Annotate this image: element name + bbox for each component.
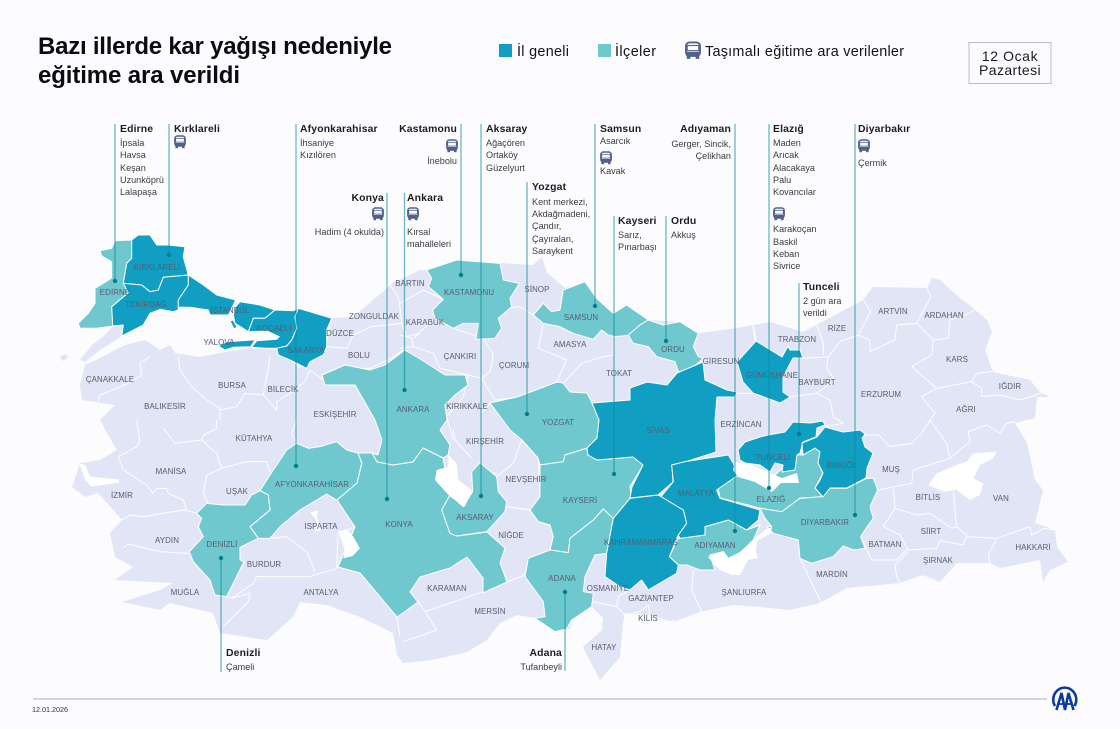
province labels: TUNCELİ [756,453,790,462]
callout: Ankara: mahalleleri [407,239,451,249]
provinces with partial closure (İlçeler) [78,240,878,632]
province labels: KASTAMONU [444,288,494,297]
callout: Yozgat: Kent merkezi, [532,197,588,207]
province labels: GAZİANTEP [628,594,674,603]
callout: Konya [315,193,389,501]
callout: Edirne: Keşan [120,163,146,173]
province labels: ANKARA [396,405,430,414]
callout: Elazığ: Elazığ [773,124,804,135]
province labels: ERZURUM [861,390,901,399]
province labels: BİLECİK [268,385,299,394]
callout: Adana [520,590,567,672]
province labels: KİLİS [638,614,658,623]
province labels: AYDIN [155,536,179,545]
base land [60,257,1068,680]
province labels: UŞAK [226,487,249,496]
province borders: northeast [753,288,1042,427]
callout: Yozgat: Akdağmadeni, [532,209,590,219]
lake: Keban [733,462,799,492]
callout: Adıyaman: Gerger, Sincik, [671,139,731,149]
province labels: İZMİR [111,491,133,500]
lakes [310,452,997,575]
province: Elazığ [718,448,823,512]
province labels: ADANA [548,574,576,583]
callout: Ordu: Ordu [671,216,696,227]
callout: Edirne: Havsa [120,150,147,160]
province: Denizli [189,491,270,597]
callout: Diyarbakır: Çermik [858,158,887,168]
province labels: DÜZCE [326,329,354,338]
province labels: NEVŞEHİR [505,475,547,484]
province: Adıyaman [669,520,760,570]
province labels: SAMSUN [564,313,598,322]
province labels: AKSARAY [456,513,494,522]
province labels: EDİRNE [100,288,130,297]
callout: Elazığ: Alacakaya [773,163,816,173]
date box [969,42,1051,84]
province labels: KARAMAN [427,584,467,593]
province: Edirne [78,240,132,328]
callout: Aksaray: Güzelyurt [486,163,525,173]
callout: Kayseri: Pınarbaşı [618,242,657,252]
province labels: ELAZIĞ [757,495,785,504]
callout: Samsun: Kavak [600,166,626,176]
province labels: ANTALYA [304,588,339,597]
province labels: ISPARTA [304,522,338,531]
callout: Elazığ: Palu [773,175,791,185]
province labels: SİVAS [646,426,670,435]
callout: Denizli: Çameli [226,662,254,672]
province labels: GİRESUN [703,357,740,366]
province labels: HAKKARİ [1015,543,1051,552]
province labels: ERZİNCAN [720,420,762,429]
province labels: KARS [946,355,968,364]
callout: Edirne [113,124,164,283]
callout: Ankara: Ankara [407,193,443,204]
province labels: BİNGÖL [827,461,858,470]
callout: Denizli: Denizli [226,648,261,659]
province: İstanbul [178,275,275,332]
province labels: ŞIRNAK [923,556,954,565]
province labels: ZONGULDAK [349,312,400,321]
callout: Aksaray: Aksaray [486,124,528,135]
province labels: SAKARYA [287,346,325,355]
province: Sivas [587,362,737,498]
province: Ordu [628,320,703,372]
province labels: DENİZLİ [207,540,237,549]
province labels: KAYSERİ [563,496,597,505]
title [38,33,392,89]
province labels: BAYBURT [798,378,836,387]
callout: Afyonkarahisar [294,124,378,468]
callout: Adıyaman: Çelikhan [696,151,731,161]
province: Tunceli [738,421,825,472]
province labels: GÜMÜŞHANE [746,371,798,380]
province labels: ARDAHAN [924,311,964,320]
provinces with full closure (İl geneli) [112,235,873,590]
legend: taşımalı eğitim: Taşımalı eğitime ara verilenler [705,44,904,60]
callout: Adana: Tufanbeyli [520,662,562,672]
province: Sakarya [277,308,332,368]
callout: Edirne: Uzunköprü [120,175,164,185]
province labels: ŞANLIURFA [722,588,767,597]
callout: Tunceli: 2 gün ara [803,296,842,306]
province: Adana [525,509,613,632]
callout: Yozgat: Çayıralan, [532,234,573,244]
province labels [86,263,1051,652]
province labels: VAN [993,494,1009,503]
lake: Van [928,452,997,500]
lake: Eğirdir [310,510,322,532]
callout: Elazığ: Arıcak [773,150,799,160]
province: Kocaeli [248,308,298,348]
legend [499,42,904,60]
province labels: KARABÜK [406,318,445,327]
callout: Adana: Adana [529,648,562,659]
callout: Kastamonu [399,124,463,277]
province labels: MARDİN [816,570,848,579]
province labels: KIRŞEHİR [466,437,504,446]
callout: Kırklareli: Kırklareli [174,124,220,135]
callout: Elazığ [767,124,816,490]
callout: Elazığ: Maden [773,138,801,148]
province labels: ARTVİN [878,307,908,316]
callout: Kırklareli [167,124,220,257]
icon: AA logo [1053,688,1076,710]
callout: Ordu: Akkuş [671,230,696,240]
callout: Ankara [402,193,451,392]
province labels: MUŞ [882,465,900,474]
lake: Beyşehir [338,530,360,558]
province labels: AFYONKARAHİSAR [275,480,349,489]
province: Ankara [322,350,468,465]
province labels: BURDUR [247,560,281,569]
callout: Kastamonu: Kastamonu [399,124,457,135]
province: Kırklareli [123,235,188,292]
legend: il geneli [499,42,569,60]
province labels: ORDU [661,345,685,354]
callout: Tunceli: Tunceli [803,282,840,293]
province labels: SİNOP [524,285,550,294]
province labels: BİTLİS [916,493,940,502]
province labels: TOKAT [606,369,632,378]
province: Bingöl [802,427,873,497]
callout: Yozgat: Yozgat [532,182,567,193]
province labels: MERSİN [474,607,506,616]
province labels: RİZE [828,324,846,333]
province labels: BALIKESİR [144,402,186,411]
title: eğitime ara verildi [38,62,240,89]
callout: Elazığ: Keban [773,249,799,259]
legend: ilçeler [598,42,656,60]
province: Diyarbakır [760,478,878,563]
date box: Pazartesi [979,62,1041,78]
legend: il geneli: İl geneli [517,42,569,60]
callout: Edirne: Edirne [120,124,153,135]
province labels: ÇANAKKALE [86,375,134,384]
callout: Elazığ: Karakoçan [773,224,816,234]
callout: Afyonkarahisar: Afyonkarahisar [300,124,378,135]
province labels: MALATYA [678,489,715,498]
province labels: KAHRAMANMARAŞ [604,538,678,547]
province labels: BARTIN [395,279,425,288]
title: Bazı illerde kar yağışı nedeniyle [38,33,392,60]
callout: Tunceli: verildi [803,308,827,318]
province labels: ESKİŞEHİR [314,410,357,419]
province: Afyonkarahisar [250,442,362,538]
date box: 12 Ocak [982,48,1039,64]
province labels: IĞDIR [999,382,1021,391]
callout: Edirne: İpsala [120,138,145,148]
province: Kayseri [530,448,643,553]
province borders: east [800,420,1055,603]
province: Samsun [533,282,648,339]
callout: Yozgat: Çandır, [532,221,561,231]
callout: Elazığ: Baskil [773,237,797,247]
callout: Kayseri [612,216,657,476]
province labels: ÇANKIRI [444,352,476,361]
callout: Samsun [593,124,641,308]
lake: Tuz [435,455,472,507]
province: Malatya [658,455,760,538]
province borders: north centre [400,290,755,440]
callout: Adıyaman: Adıyaman [680,124,731,135]
callout: Ordu [664,216,696,343]
province labels: HATAY [591,643,617,652]
province labels: MANİSA [156,467,187,476]
province labels: DİYARBAKIR [801,518,849,527]
callout: Elazığ: Sivrice [773,261,800,271]
province labels: YALOVA [203,338,235,347]
callout: Konya: Konya [351,193,384,204]
province: Yalova [218,340,255,350]
legend: ilçeler: İlçeler [615,42,656,60]
callout: Aksaray: Ortaköy [486,150,518,160]
province labels: KONYA [385,520,413,529]
callout: Yozgat [525,182,590,416]
province labels: TEKİRDAĞ [125,300,167,309]
province: Kahramanmaraş [605,495,687,590]
callout: Aksaray: Ağaçören [486,138,525,148]
callout: Yozgat: Saraykent [532,246,573,256]
callout: Kayseri: Kayseri [618,216,657,227]
callout: Diyarbakır [853,124,910,517]
callout: Afyonkarahisar: İhsaniye [300,138,334,148]
province: Yozgat [490,382,600,465]
province borders: south centre [403,430,702,642]
province: Gümüşhane [737,341,803,403]
callout: Samsun: Asarcık [600,136,631,146]
province labels: SİİRT [921,527,941,536]
province labels: BATMAN [869,540,902,549]
province: Aksaray [442,463,507,536]
callout: Ankara: Kırsal [407,227,430,237]
callout: Diyarbakır: Diyarbakır [858,124,910,135]
province labels: AMASYA [554,340,587,349]
callout: Edirne: Lalapaşa [120,187,158,197]
callout: Kastamonu: İnebolu [427,156,457,166]
callout: Denizli [219,556,261,672]
callout: Samsun: Samsun [600,124,641,135]
callout: Aksaray [479,124,528,498]
callout: Elazığ: Kovancılar [773,187,816,197]
province: Konya [337,448,507,617]
lake: Atatürk [708,527,772,575]
province labels: YOZGAT [542,418,574,427]
callout: Konya: Hadim (4 okulda) [315,227,384,237]
province borders: west [118,420,400,637]
province labels: ÇORUM [499,361,529,370]
province labels: KÜTAHYA [236,434,273,443]
white inlets [79,463,119,487]
footer rule and date: 12.01.2026 [32,705,68,714]
province borders: northwest [98,285,420,420]
map of Turkey [60,235,1068,680]
province labels: KOCAELİ [257,324,291,333]
callout: Adıyaman [671,124,737,533]
callout: Afyonkarahisar: Kızılören [300,150,336,160]
province labels: AĞRI [956,405,976,414]
province labels: MUĞLA [171,588,200,597]
callout: Tunceli [797,282,842,436]
province labels: TRABZON [778,335,816,344]
province labels: BURSA [218,381,246,390]
province: Tekirdağ [112,275,188,336]
province labels: İSTANBUL [211,306,250,315]
province labels: BOLU [348,351,370,360]
province: Kastamonu [427,260,519,339]
province labels: OSMANİYE [587,584,629,593]
callout: Kayseri: Sarız, [618,230,642,240]
province labels: KIRKLARELİ [134,263,180,272]
province labels: NİĞDE [498,531,524,540]
province labels: KIRIKKALE [446,402,488,411]
province labels: ADIYAMAN [694,541,736,550]
